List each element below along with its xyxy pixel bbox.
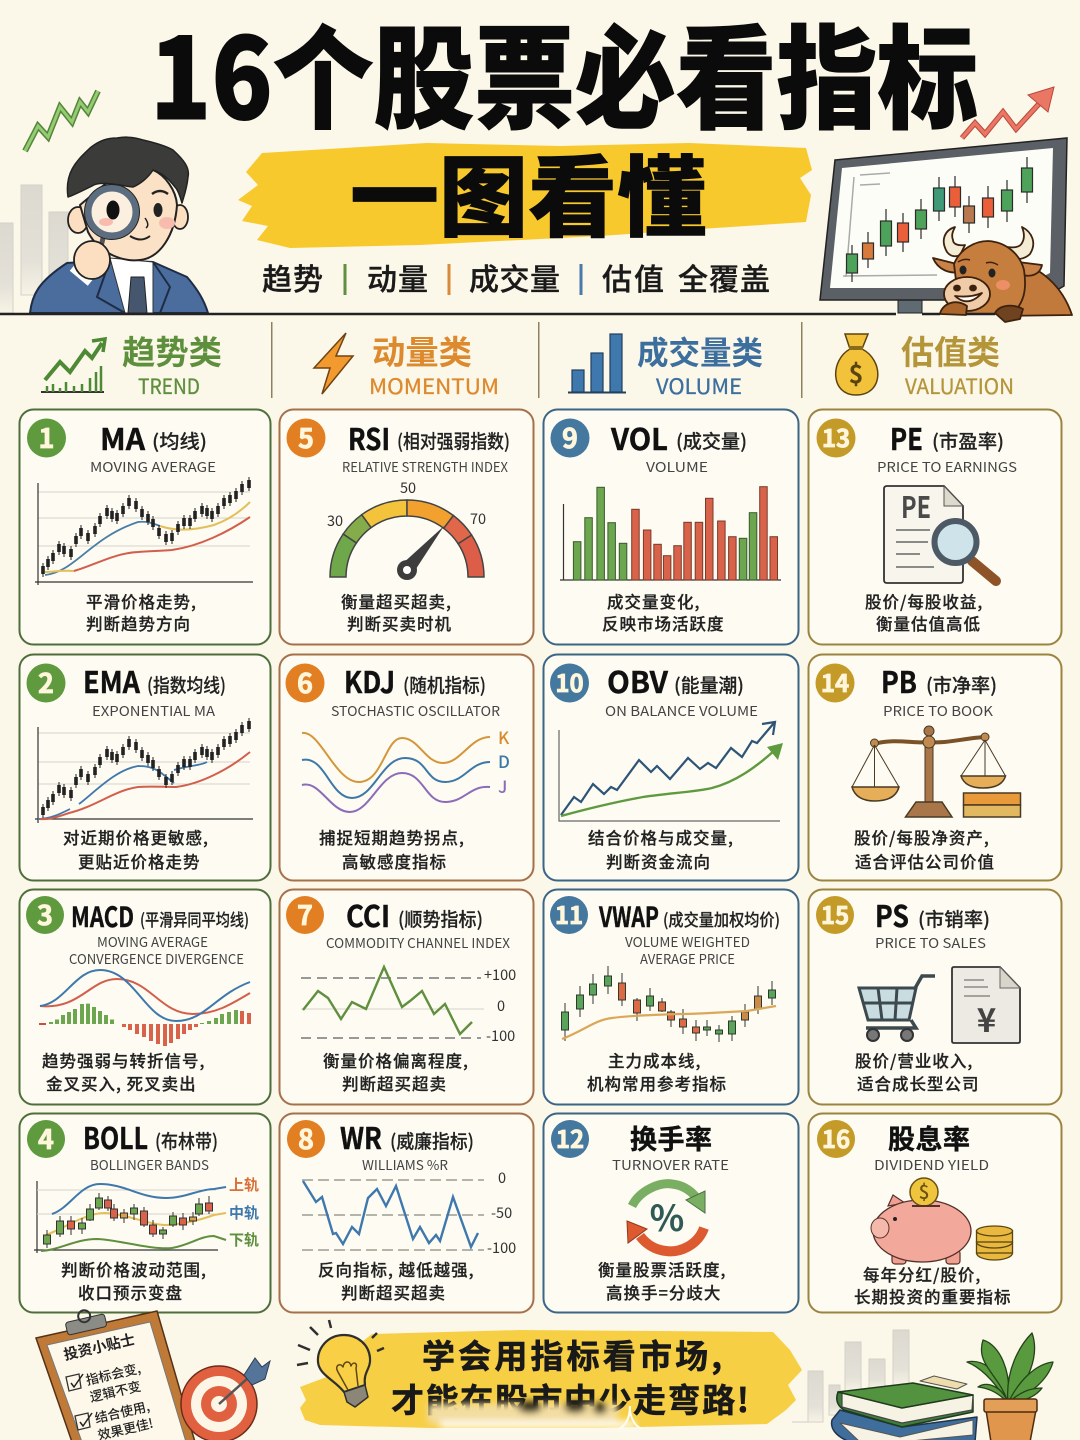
heading MACD bbox=[71, 896, 249, 936]
badge 2: 2 bbox=[38, 662, 54, 701]
heading OBV bbox=[607, 658, 744, 702]
heading PB: (市净率) bbox=[926, 671, 997, 698]
heading OBV: (能量潮) bbox=[674, 671, 744, 698]
category label: 估值类 bbox=[901, 326, 1000, 374]
heading VOL bbox=[610, 415, 747, 459]
panel: 1 MA bbox=[20, 410, 270, 644]
category: trend bbox=[41, 326, 222, 401]
heading KDJ bbox=[344, 658, 486, 702]
description: 结合价格与成交量, bbox=[588, 825, 734, 849]
badge 2 bbox=[26, 662, 66, 702]
chart: Bollinger bands: 中轨 bbox=[229, 1202, 259, 1223]
heading VOL: (成交量) bbox=[676, 427, 747, 454]
panel: 7 CCI bbox=[280, 890, 534, 1104]
badge 16: 16 bbox=[822, 1120, 850, 1155]
description: 反映市场活跃度 bbox=[602, 611, 724, 635]
description: 机构常用参考指标 bbox=[587, 1071, 727, 1095]
heading RSI: (相对强弱指数) bbox=[397, 427, 510, 454]
heading WR: (威廉指标) bbox=[390, 1127, 474, 1154]
category: trend: TREND bbox=[138, 371, 200, 401]
english name: PRICE TO SALES bbox=[875, 932, 986, 952]
chart: KDJ lines: D bbox=[498, 748, 510, 773]
panel: 13 PE bbox=[808, 410, 1062, 644]
illustration: analyst with magnifying glass bbox=[30, 137, 208, 313]
icon: PE document and magnifier: PE bbox=[901, 483, 931, 527]
description bbox=[341, 589, 452, 635]
badge 10 bbox=[550, 664, 589, 702]
badge 15: 15 bbox=[821, 896, 849, 931]
category: volume: VOLUME bbox=[656, 371, 742, 401]
clipboard: investment tips: 逻辑不变 bbox=[88, 1376, 143, 1406]
chart: MA candles bbox=[35, 477, 253, 585]
yellow brush banner: conclusion bbox=[300, 1330, 802, 1428]
description: 更贴近价格走势 bbox=[78, 849, 200, 873]
description: 高换手=分歧大 bbox=[606, 1280, 721, 1304]
english name: TURNOVER RATE bbox=[612, 1154, 729, 1174]
description: 平滑价格走势, bbox=[86, 589, 197, 613]
badge 5: 5 bbox=[298, 417, 314, 456]
icon: volume bars bbox=[568, 334, 626, 392]
panel: 4 BOLL bbox=[20, 1114, 270, 1312]
heading PB: PB bbox=[881, 658, 917, 702]
icon: red rising zigzag arrow bbox=[962, 87, 1054, 138]
description: 主力成本线, bbox=[608, 1048, 701, 1072]
chart: KDJ lines bbox=[302, 724, 510, 812]
description: 衡量超买超卖, bbox=[341, 589, 452, 613]
clipboard: investment tips: 指标会变, bbox=[84, 1358, 142, 1389]
badge 11 bbox=[550, 896, 588, 934]
icon: green rising zigzag bbox=[25, 91, 98, 151]
english name: MOVING AVERAGE bbox=[97, 931, 208, 951]
description: 判断资金流向 bbox=[606, 849, 711, 873]
description: 趋势强弱与转折信号, bbox=[42, 1048, 205, 1072]
heading RSI: RSI bbox=[348, 415, 390, 459]
description bbox=[865, 589, 983, 635]
badge 1 bbox=[27, 417, 66, 458]
description: 适合成长型公司 bbox=[857, 1071, 980, 1095]
description bbox=[598, 1257, 726, 1304]
icon: lightbulb bbox=[297, 1320, 384, 1407]
chart: VWAP candles bbox=[562, 966, 776, 1042]
description bbox=[42, 1048, 205, 1095]
chart: RSI gauge: 50 bbox=[400, 477, 416, 498]
english name: VOLUME WEIGHTED bbox=[625, 931, 750, 951]
badge 12: 12 bbox=[556, 1120, 584, 1155]
badge 7: 7 bbox=[297, 894, 313, 933]
badge 3 bbox=[26, 894, 64, 934]
clipboard: investment tips: 投资小贴士 bbox=[61, 1328, 137, 1365]
badge 12 bbox=[551, 1120, 589, 1158]
english name bbox=[625, 931, 750, 968]
chart: Bollinger bands: 下轨 bbox=[229, 1229, 259, 1250]
chart: WR line: -50 bbox=[491, 1202, 512, 1223]
heading WR: WR bbox=[340, 1114, 382, 1158]
tagline bbox=[262, 255, 770, 299]
description: 判断超买超卖 bbox=[342, 1071, 447, 1095]
chart: RSI gauge bbox=[327, 477, 486, 580]
subtitle heading: 一图看懂 bbox=[350, 128, 706, 255]
english name: STOCHASTIC OSCILLATOR bbox=[331, 700, 500, 720]
description: 反向指标, 越低越强, bbox=[318, 1257, 475, 1281]
heading MA: MA bbox=[100, 415, 146, 459]
heading MA bbox=[100, 415, 207, 459]
chart: WR line bbox=[302, 1167, 516, 1258]
icon: piggy bank: $ bbox=[919, 1178, 929, 1205]
category: valuation bbox=[836, 326, 1014, 401]
description: 股价/每股收益, bbox=[865, 589, 983, 613]
chart: WR line: 0 bbox=[498, 1167, 506, 1188]
english name: CONVERGENCE DIVERGENCE bbox=[69, 948, 244, 968]
icon: balance scale with books bbox=[852, 726, 1020, 817]
illustration: background bars bbox=[792, 1330, 909, 1422]
badge 13: 13 bbox=[822, 419, 850, 454]
badge 13 bbox=[816, 418, 856, 458]
english name: ON BALANCE VOLUME bbox=[605, 700, 758, 720]
heading BOLL: (布林带) bbox=[155, 1127, 218, 1154]
badge 3: 3 bbox=[37, 894, 53, 933]
heading PS: PS bbox=[875, 892, 909, 936]
heading PB bbox=[881, 658, 997, 702]
illustration: bull mascot bbox=[933, 227, 1072, 322]
description bbox=[61, 1257, 207, 1304]
description: 成交量变化, bbox=[607, 589, 700, 613]
panel: 6 KDJ bbox=[280, 654, 534, 880]
icon: lightning bolt bbox=[314, 333, 353, 394]
heading VWAP: VWAP bbox=[598, 896, 659, 936]
chart: RSI gauge: 70 bbox=[470, 508, 486, 529]
chart: RSI gauge: 30 bbox=[327, 510, 343, 531]
category: momentum bbox=[314, 326, 499, 401]
conclusion text: 学会用指标看市场, bbox=[422, 1330, 722, 1378]
category: volume bbox=[568, 328, 763, 401]
heading RSI bbox=[348, 415, 510, 459]
badge 15 bbox=[816, 896, 854, 934]
conclusion text bbox=[391, 1330, 749, 1422]
heading EMA: (指数均线) bbox=[147, 671, 226, 698]
heading VWAP: (成交量加权均价) bbox=[663, 906, 780, 931]
description: 衡量股票活跃度, bbox=[598, 1257, 726, 1281]
badge 5 bbox=[286, 417, 326, 458]
panel: 5 RSI bbox=[280, 410, 534, 644]
description bbox=[86, 589, 197, 635]
illustration: candlestick monitor bbox=[820, 138, 1067, 313]
icon: turnover arrows with percent: % bbox=[650, 1190, 684, 1242]
chart: KDJ lines: J bbox=[498, 773, 507, 798]
heading MACD: MACD bbox=[71, 896, 134, 936]
description bbox=[855, 1048, 980, 1095]
tagline: 全覆盖 bbox=[678, 255, 770, 299]
chart: CCI bbox=[301, 964, 516, 1046]
watermark blur bbox=[428, 1399, 643, 1436]
icon: money bag: $ bbox=[849, 355, 863, 391]
illustration: potted plant bbox=[967, 1333, 1053, 1440]
heading BOLL bbox=[83, 1114, 218, 1158]
panel: 9 VOL bbox=[544, 410, 798, 644]
heading MA: (均线) bbox=[152, 427, 207, 454]
category label: 趋势类 bbox=[122, 326, 222, 374]
description: 对近期价格更敏感, bbox=[63, 825, 209, 849]
chart: WR line: -100 bbox=[487, 1237, 516, 1258]
tagline: 动量 bbox=[367, 255, 428, 299]
heading PE: (市盈率) bbox=[932, 427, 1004, 454]
description bbox=[854, 1262, 1012, 1308]
panel: 2 EMA bbox=[20, 654, 270, 880]
tagline: 趋势 bbox=[262, 255, 323, 299]
chart: volume bars bbox=[560, 487, 781, 580]
panel: 11 VWAP bbox=[544, 890, 798, 1104]
heading CCI: CCI bbox=[346, 892, 390, 936]
chart: CCI: 0 bbox=[497, 995, 505, 1016]
chart: CCI: -100 bbox=[486, 1025, 515, 1046]
badge 10: 10 bbox=[555, 664, 584, 699]
description: 判断买卖时机 bbox=[347, 611, 452, 635]
description bbox=[63, 825, 209, 873]
description: 高敏感度指标 bbox=[342, 849, 447, 873]
badge 14: 14 bbox=[821, 664, 849, 699]
description: 捕捉短期趋势拐点, bbox=[319, 825, 465, 849]
english name: WILLIAMS %R bbox=[362, 1154, 448, 1174]
badge 8 bbox=[287, 1118, 325, 1158]
heading dividend yield: 股息率 bbox=[888, 1118, 970, 1157]
heading PS: (市销率) bbox=[918, 905, 990, 932]
heading VWAP bbox=[598, 896, 780, 936]
panel: 16 dividend bbox=[808, 1114, 1062, 1312]
heading EMA: EMA bbox=[83, 658, 141, 702]
description bbox=[588, 825, 734, 873]
heading BOLL: BOLL bbox=[83, 1114, 148, 1158]
heading KDJ: KDJ bbox=[344, 658, 395, 702]
english name bbox=[69, 931, 244, 968]
description: 判断超买超卖 bbox=[341, 1280, 446, 1304]
english name: COMMODITY CHANNEL INDEX bbox=[326, 932, 510, 952]
description: 收口预示变盘 bbox=[78, 1280, 183, 1304]
heading CCI bbox=[346, 892, 483, 936]
badge 6: 6 bbox=[297, 662, 313, 701]
panel: 3 MACD bbox=[20, 890, 270, 1104]
tagline: 成交量 bbox=[469, 255, 560, 299]
panel: 14 PB bbox=[808, 654, 1062, 880]
description: 衡量估值高低 bbox=[876, 611, 981, 635]
english name: RELATIVE STRENGTH INDEX bbox=[342, 456, 508, 476]
english name: VOLUME bbox=[646, 456, 708, 476]
illustration: stacked books bbox=[832, 1376, 977, 1440]
description: 长期投资的重要指标 bbox=[854, 1284, 1012, 1308]
chart: EMA candles bbox=[35, 718, 253, 823]
icon: yen document bbox=[952, 967, 1020, 1043]
description bbox=[602, 589, 724, 635]
english name: PRICE TO BOOK bbox=[883, 700, 993, 720]
badge 14 bbox=[816, 664, 854, 702]
heading KDJ: (随机指标) bbox=[403, 671, 486, 698]
badge 7 bbox=[286, 894, 324, 934]
badge 9: 9 bbox=[562, 417, 578, 456]
watermark blur: 人 bbox=[617, 1399, 643, 1436]
description: 金叉买入, 死叉卖出 bbox=[46, 1071, 197, 1095]
chart: OBV line bbox=[559, 722, 783, 821]
chart: CCI: +100 bbox=[484, 964, 516, 985]
english name: BOLLINGER BANDS bbox=[90, 1154, 209, 1174]
badge 4 bbox=[27, 1118, 65, 1158]
english name: PRICE TO EARNINGS bbox=[877, 456, 1017, 476]
heading MACD: (平滑异同平均线) bbox=[140, 906, 249, 931]
conclusion text: 才能在股市中少走弯路! bbox=[391, 1374, 749, 1422]
description: 股价/每股净资产, bbox=[854, 825, 990, 849]
description: 衡量价格偏离程度, bbox=[323, 1048, 469, 1072]
description: 每年分红/股价, bbox=[863, 1262, 981, 1286]
header background bars bbox=[0, 185, 68, 313]
yellow brush banner bbox=[238, 143, 812, 248]
category label: 动量类 bbox=[372, 326, 472, 374]
badge 16 bbox=[817, 1120, 855, 1158]
description bbox=[318, 1257, 475, 1304]
description bbox=[319, 825, 465, 873]
header divider bbox=[0, 313, 995, 315]
description: 股价/营业收入, bbox=[855, 1048, 973, 1072]
category: valuation: VALUATION bbox=[905, 371, 1014, 401]
chart: Bollinger bands bbox=[34, 1174, 259, 1253]
english name: AVERAGE PRICE bbox=[640, 948, 735, 968]
english name: MOVING AVERAGE bbox=[90, 456, 216, 476]
chart: KDJ lines: K bbox=[498, 724, 510, 749]
heading turnover rate: 换手率 bbox=[630, 1118, 712, 1157]
clipboard: investment tips bbox=[36, 1306, 195, 1440]
heading EMA bbox=[83, 658, 226, 702]
icon: turnover arrows with percent bbox=[627, 1184, 705, 1251]
heading OBV: OBV bbox=[607, 658, 668, 702]
panel: 10 OBV bbox=[544, 654, 798, 880]
clipboard: investment tips: 结合使用, bbox=[93, 1396, 151, 1427]
panel: 8 WR bbox=[280, 1114, 534, 1312]
panel: 12 turnover bbox=[544, 1114, 798, 1312]
description bbox=[854, 825, 995, 873]
badge 11: 11 bbox=[555, 896, 583, 931]
english name: EXPONENTIAL MA bbox=[92, 700, 216, 720]
chart: MACD bbox=[39, 970, 250, 1046]
icon: trend arrow bbox=[41, 339, 105, 392]
chart: Bollinger bands: 上轨 bbox=[229, 1174, 259, 1195]
category: momentum: MOMENTUM bbox=[369, 371, 499, 401]
description bbox=[587, 1048, 727, 1095]
category label: 成交量类 bbox=[637, 328, 763, 374]
badge 8: 8 bbox=[298, 1118, 314, 1157]
description: 判断价格波动范围, bbox=[61, 1257, 207, 1281]
badge 1: 1 bbox=[39, 417, 54, 456]
heading VOL: VOL bbox=[610, 415, 668, 459]
icon: piggy bank bbox=[871, 1178, 1012, 1264]
heading PE bbox=[890, 415, 1004, 459]
badge 9 bbox=[550, 417, 590, 458]
description: 适合评估公司价值 bbox=[855, 849, 995, 873]
icon: money bag bbox=[836, 334, 878, 395]
icon: target with arrow bbox=[181, 1358, 270, 1440]
heading PE: PE bbox=[890, 415, 923, 459]
heading CCI: (顺势指标) bbox=[398, 905, 483, 932]
icon: shopping cart bbox=[859, 976, 935, 1041]
badge 6 bbox=[286, 662, 324, 702]
description: 判断趋势方向 bbox=[86, 611, 191, 635]
panel: 15 PS bbox=[808, 890, 1062, 1104]
icon: PE document and magnifier bbox=[884, 483, 996, 583]
tagline: 估值 bbox=[602, 255, 664, 299]
description bbox=[323, 1048, 469, 1095]
icon: yen document: ¥ bbox=[977, 994, 996, 1042]
english name: DIVIDEND YIELD bbox=[874, 1154, 989, 1174]
heading WR bbox=[340, 1114, 474, 1158]
badge 4: 4 bbox=[38, 1118, 54, 1157]
heading PS bbox=[875, 892, 990, 936]
